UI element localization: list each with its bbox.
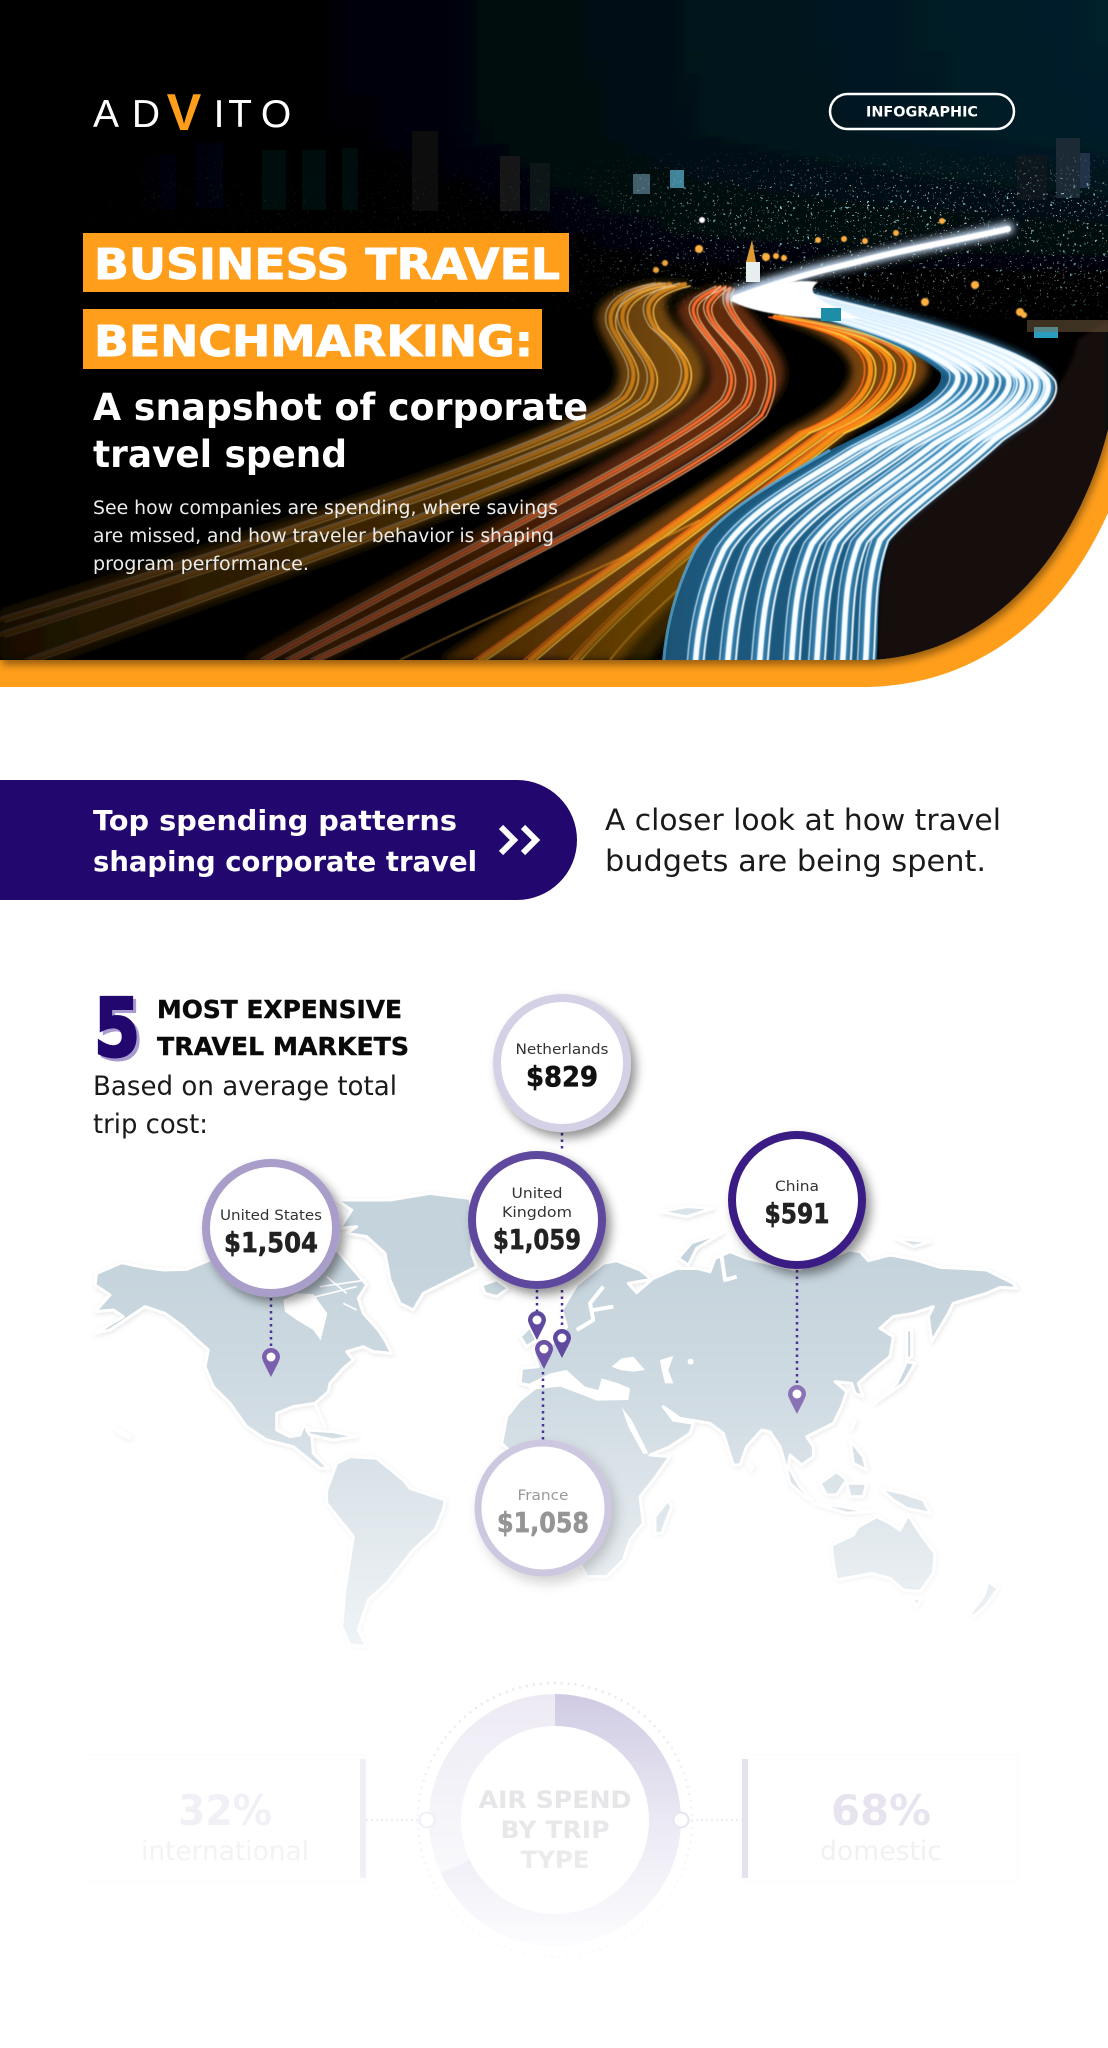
callout: United Kingdom: [472, 1155, 602, 1285]
dotted connector lines: [271, 1133, 797, 1440]
logo: ADVITO: A: [93, 93, 119, 136]
australia and islands: [748, 1420, 998, 1617]
heading: five most expensive travel markets: trip cost:: [93, 1109, 208, 1140]
street lamps: [652, 216, 1028, 319]
pin: United Kingdom: [528, 1311, 546, 1340]
callout: Netherlands: Netherlands: [516, 1042, 608, 1058]
far white band: [730, 228, 1008, 297]
intro paragraph: [93, 498, 558, 575]
logo: ADVITO: V: [167, 84, 202, 142]
pin: France: [535, 1340, 553, 1369]
heading: five most expensive travel markets: TRAVEL MARKETS: [157, 1032, 409, 1061]
north america and greenland: [95, 1193, 537, 1468]
map fade overlay: [60, 1250, 1060, 1670]
pin: Netherlands: [553, 1329, 571, 1358]
tag: infographic pill: [830, 94, 1014, 129]
subtitle: [93, 386, 588, 476]
panel: international box: [88, 1755, 366, 1882]
blue-white road: [663, 290, 1054, 670]
logo: ADVITO: O: [261, 93, 291, 136]
section banner: top spending patterns: [0, 780, 577, 900]
callout: United States: $1,504: [224, 1226, 318, 1259]
icon: double chevron: [501, 827, 536, 853]
donut chart: BY TRIP: [500, 1816, 610, 1844]
heading: five most expensive travel markets: [93, 982, 409, 1140]
heading: five most expensive travel markets: 5: [97, 985, 143, 1078]
section intro text: budgets are being spent.: [605, 844, 986, 878]
panel: domestic box: 68%: [831, 1786, 931, 1835]
callout: China: $591: [764, 1197, 830, 1230]
callout: United States: United States: [220, 1208, 322, 1224]
subtitle: A snapshot of corporate: [93, 386, 588, 429]
subtitle: travel spend: [93, 433, 347, 476]
logo: ADVITO: [93, 84, 291, 142]
pin: China: [788, 1385, 806, 1414]
logo: ADVITO: T: [228, 93, 252, 136]
logo: ADVITO: I: [214, 93, 224, 136]
panel: international box: international: [141, 1836, 309, 1867]
callout: France: $1,058: [497, 1506, 589, 1539]
donut chart: [366, 1683, 742, 1957]
hero night highway photo: [0, 0, 1108, 671]
callout: China: [732, 1135, 862, 1265]
intro paragraph: are missed, and how traveler behavior is shaping: [93, 526, 554, 547]
section banner: top spending patterns: shaping corporate travel: [93, 845, 477, 878]
orange bundles: [0, 283, 928, 660]
callout: Netherlands: $829: [526, 1060, 598, 1093]
intro paragraph: program performance.: [93, 554, 309, 575]
callout: Netherlands: [497, 998, 627, 1128]
heading: five most expensive travel markets: MOST EXPENSIVE: [157, 995, 402, 1024]
south america: [327, 1457, 445, 1647]
world map: [95, 1193, 1017, 1647]
panel: domestic box: [742, 1755, 1018, 1882]
donut chart: TYPE: [520, 1846, 590, 1874]
callout: China: China: [775, 1179, 819, 1195]
panel: international box: 32%: [178, 1786, 272, 1835]
callout: United Kingdom: United: [512, 1186, 562, 1202]
eurasia and africa: [502, 1207, 1017, 1577]
section intro text: [605, 803, 1001, 878]
tag: infographic pill: INFOGRAPHIC: [866, 104, 978, 120]
logo: ADVITO: D: [132, 93, 160, 136]
section intro text: A closer look at how travel: [605, 803, 1001, 837]
heading: five most expensive travel markets: 5: [94, 982, 140, 1075]
donut chart: AIR SPEND: [478, 1786, 632, 1814]
intro paragraph: See how companies are spending, where savings: [93, 498, 558, 519]
section banner: top spending patterns: Top spending patterns: [93, 804, 457, 837]
panel: air spend by trip type (faded): [88, 1683, 1018, 1957]
title line 2: BENCHMARKING:: [94, 317, 533, 367]
pin: United States: [262, 1348, 280, 1377]
callout: United Kingdom: Kingdom: [502, 1205, 572, 1221]
hero orange backing shape: [0, 400, 1108, 687]
panel: domestic box: domestic: [820, 1836, 942, 1867]
callout: France: [478, 1443, 608, 1573]
callout: United Kingdom: $1,059: [493, 1223, 581, 1256]
callout: France: France: [518, 1488, 569, 1504]
title line 1: BUSINESS TRAVEL: [94, 240, 560, 290]
heading: five most expensive travel markets: Based on average total: [93, 1071, 397, 1102]
callout: United States: [206, 1163, 336, 1293]
